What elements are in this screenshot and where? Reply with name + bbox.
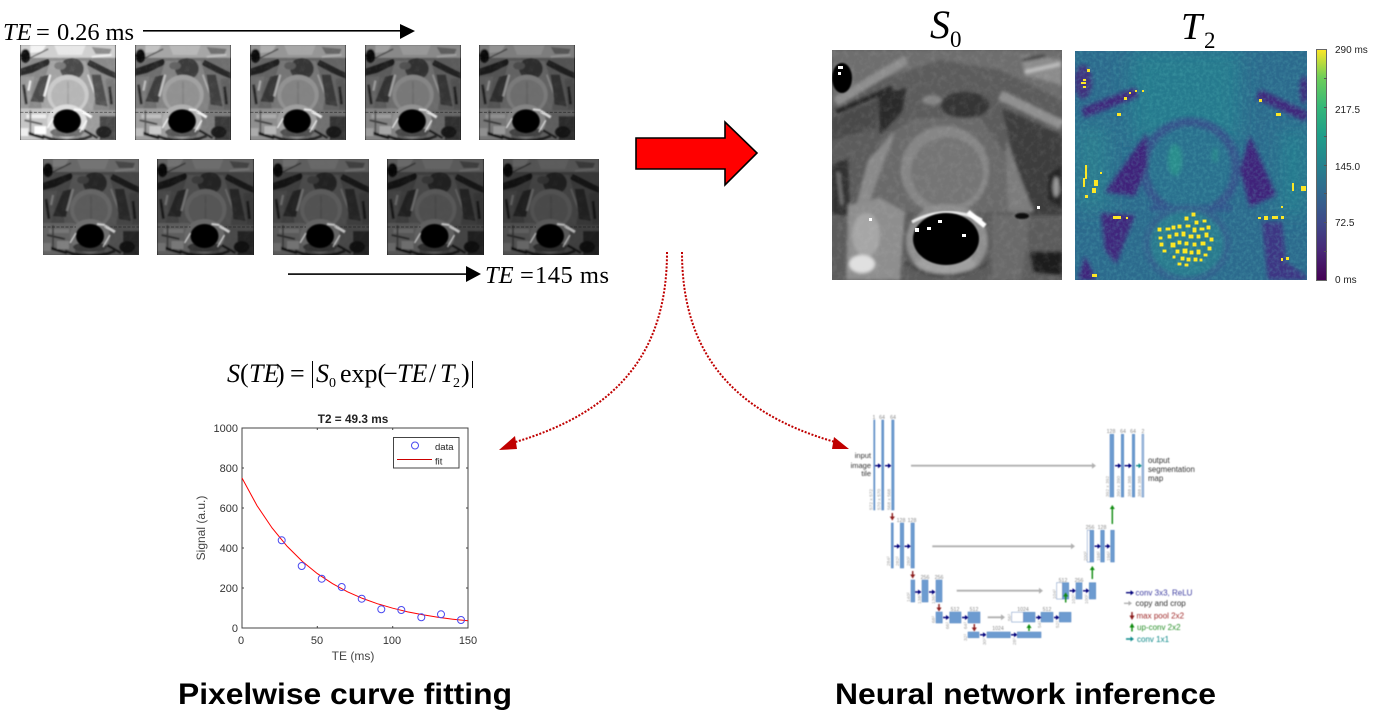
size labels: 392 x 392 (1105, 476, 1111, 497)
data points (278, 537, 464, 624)
size labels: 388 x 388 (1137, 476, 1143, 497)
heading: S0: 0 (950, 27, 962, 52)
channel counts: 64 (1130, 429, 1136, 435)
size labels: 140² (906, 592, 912, 602)
output label (1148, 456, 1195, 483)
equation: ) (461, 359, 470, 388)
MRI image 6 (43, 159, 139, 255)
MRI image 5 (479, 45, 575, 140)
label: TE = 0.26 ms: = (36, 19, 50, 46)
y axis label: Signal (a.u.) (194, 496, 208, 560)
equation: / (429, 359, 437, 388)
channel counts: 256 (1086, 525, 1094, 531)
channel counts: 512 (951, 607, 959, 613)
input label (851, 451, 872, 478)
label: TE = 0.26 ms: TE (3, 19, 32, 46)
heading: Pixelwise curve fitting: Pixelwise curve fitting (178, 678, 512, 711)
U-Net legend (1124, 588, 1193, 644)
size labels: 100² (1084, 594, 1090, 604)
y axis numbers: 200 (220, 583, 238, 595)
size labels: 28² (1012, 638, 1018, 645)
channel counts: 64 (890, 415, 896, 421)
size labels: 136² (931, 594, 937, 604)
channel counts: 512 (970, 607, 978, 613)
colorbar labels: 72.5 (1335, 218, 1355, 229)
U-Net blocks (874, 420, 1144, 638)
x axis numbers: 50 (311, 635, 323, 647)
dotted arrow: to curve fitting (499, 252, 667, 450)
x axis numbers: 0 (238, 635, 244, 647)
y axis numbers: 600 (220, 503, 238, 515)
y axis numbers: 0 (232, 623, 238, 635)
channel counts: 2 (1142, 429, 1145, 435)
equation: − (383, 359, 398, 388)
channel counts: 512 (1059, 578, 1067, 584)
channel counts: 1024 (1017, 607, 1029, 613)
colorbar labels: 0 ms (1335, 275, 1357, 286)
U-Net legend: up-conv 2x2 (1137, 623, 1181, 632)
chart: signal decay (194, 412, 477, 663)
white spots (838, 66, 1040, 237)
colorbar labels: 217.5 (1335, 105, 1360, 116)
size labels: 56² (1007, 614, 1013, 621)
size labels: 64² (963, 622, 969, 629)
legend: data (435, 442, 454, 453)
channel counts (873, 415, 1145, 632)
equation: exp( (340, 359, 386, 388)
MRI image 8 (273, 159, 369, 255)
MRI image 7 (157, 159, 254, 255)
equation: ( (240, 359, 249, 388)
size labels (868, 476, 1143, 645)
size labels: 104² (1052, 589, 1058, 599)
U-Net legend: max pool 2x2 (1136, 612, 1185, 620)
size labels: 138² (917, 594, 923, 604)
image: S0 map (832, 50, 1062, 280)
equation: T (440, 359, 456, 388)
colorbar labels (1335, 45, 1368, 286)
image: T2 map (1075, 51, 1307, 280)
output label: map (1148, 474, 1164, 483)
size labels: 102² (1071, 594, 1077, 604)
dotted arrow: to neural network (682, 252, 849, 449)
MRI image 9 (387, 159, 484, 255)
size labels: 284² (886, 556, 892, 566)
MRI image 1 (20, 45, 116, 140)
size labels: 52² (1055, 621, 1061, 628)
size labels: 568 x 568 (886, 489, 892, 510)
equation: TE (397, 359, 427, 388)
x axis numbers (238, 635, 477, 647)
arrow: echo time increases, bottom row (288, 266, 481, 282)
MRI image 2 (135, 45, 231, 140)
channel counts: 1 (873, 415, 876, 421)
y axis numbers: 800 (220, 463, 238, 475)
equation: 0 (329, 376, 336, 391)
size labels: 32² (963, 634, 969, 641)
equation: = (290, 359, 305, 388)
size labels: 196² (1106, 551, 1112, 561)
U-Net legend: copy and crop (1136, 599, 1186, 608)
arrow: echo time increases, top row (143, 24, 415, 39)
y axis numbers: 400 (220, 543, 238, 555)
MRI image 4 (365, 45, 461, 140)
channel counts: 128 (897, 518, 905, 524)
chart title: T2 = 49.3 ms (318, 412, 389, 426)
channel counts: 128 (1098, 525, 1106, 531)
size labels: 30² (982, 638, 988, 645)
equation: TE (249, 359, 279, 388)
label: TE = 145 ms: 145 ms (535, 262, 609, 289)
copy and crop arrows (911, 463, 1096, 620)
label: TE = 145 ms: TE (485, 262, 514, 289)
input label: tile (861, 469, 871, 478)
size labels: 570 x 570 (876, 489, 882, 510)
MRI image 3 (250, 45, 346, 140)
label: TE = 145 ms: = (520, 262, 534, 289)
size labels: 390 x 390 (1116, 476, 1122, 497)
output label: output (1148, 456, 1171, 465)
size labels: 198² (1096, 551, 1102, 561)
up-conv arrows (1026, 505, 1115, 631)
channel counts: 128 (1107, 429, 1115, 435)
U-Net legend: conv 1x1 (1137, 635, 1170, 644)
size labels: 66² (945, 622, 951, 629)
label: TE = 0.26 ms: 0.26 ms (57, 19, 134, 46)
yellow pixels in rectum (1158, 213, 1213, 266)
size labels: 572 x 572 (868, 489, 874, 510)
channel counts: 256 (921, 575, 929, 581)
U-Net legend: conv 3x3, ReLU (1136, 588, 1193, 598)
x axis numbers: 100 (383, 635, 401, 647)
y axis numbers (214, 423, 238, 635)
size labels: 388 x 388 (1127, 476, 1133, 497)
heading: T2: 2 (1204, 28, 1216, 53)
MRI image 10 (503, 159, 599, 255)
plot area (242, 428, 468, 628)
colorbar (1316, 45, 1368, 286)
channel counts: 64 (1120, 429, 1126, 435)
channel counts: 256 (1075, 578, 1083, 584)
output label: segmentation (1148, 465, 1195, 474)
equation: S (316, 359, 329, 388)
colorbar labels: 145.0 (1335, 162, 1360, 173)
heading: Neural network inference: Neural network inference (835, 678, 1216, 711)
equation: S (227, 359, 240, 388)
channel counts: 64 (879, 415, 885, 421)
equation: 2 (453, 376, 460, 391)
size labels: 200² (1083, 551, 1089, 561)
fit curve (242, 478, 468, 621)
convolution arrows (875, 463, 1132, 637)
size labels: 68² (931, 616, 937, 623)
yellow outlier pixels (1081, 69, 1306, 277)
channel counts: 1024 (992, 626, 1004, 632)
input label: input (855, 451, 872, 460)
conv 1x1 arrow (1136, 463, 1142, 468)
channel counts: 256 (935, 575, 943, 581)
x axis numbers: 150 (459, 635, 477, 647)
colorbar labels: 290 ms (1335, 45, 1368, 56)
size labels: 54² (1037, 621, 1043, 628)
tick marks (242, 428, 468, 628)
equation absolute bars (312, 361, 473, 388)
legend: fit (435, 456, 443, 468)
x axis label: TE (ms) (332, 649, 374, 663)
heading: S0: S (930, 2, 950, 47)
size labels: 282² (895, 556, 901, 566)
input label: image (851, 461, 871, 470)
channel counts: 512 (1043, 607, 1051, 613)
big red arrow (636, 122, 757, 185)
max pool arrows (890, 513, 977, 632)
diagram: U-Net architecture (851, 415, 1195, 645)
legend (394, 438, 459, 468)
channel counts: 128 (908, 518, 916, 524)
panel: MRI image series (20, 45, 599, 256)
y axis numbers: 1000 (214, 423, 238, 435)
heading: T2: T (1181, 6, 1205, 48)
size labels: 280² (906, 556, 912, 566)
equation: ) (276, 359, 285, 388)
